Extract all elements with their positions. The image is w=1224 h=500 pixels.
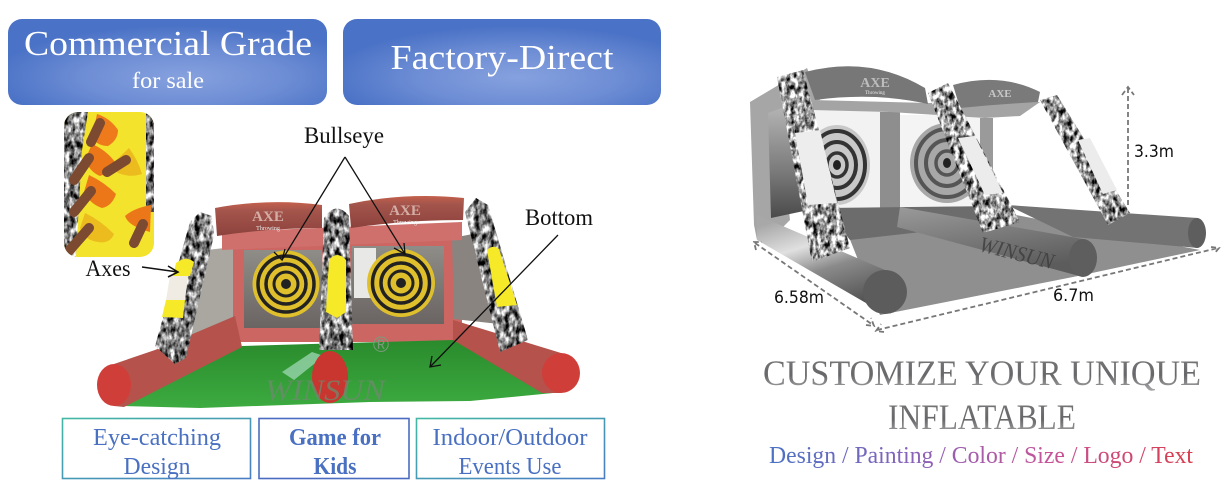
box: Game for Kids: Kids xyxy=(314,454,356,480)
box: Indoor/Outdoor Events Use xyxy=(416,418,604,480)
arrows from Bullseye label xyxy=(274,157,405,260)
box: Game for Kids: Game for xyxy=(289,425,381,451)
button: Commercial Grade for sale xyxy=(8,19,327,105)
back wall frame xyxy=(222,232,462,342)
label: Axes: Axes xyxy=(86,256,131,281)
dimension label: 3.3m: 3.3m xyxy=(1134,142,1174,162)
dimension arrow: 3.3m height xyxy=(1122,87,1134,205)
box: Game for Kids xyxy=(259,418,409,480)
tube rear xyxy=(1007,205,1206,248)
button: Commercial Grade for sale: Commercial Grade xyxy=(24,24,312,63)
banner front xyxy=(805,66,928,104)
right log xyxy=(465,198,528,352)
banner rear: AXE xyxy=(988,88,1012,100)
banner right: AXE xyxy=(389,203,421,219)
right tube xyxy=(453,320,580,393)
arrow from Axes label xyxy=(142,266,178,277)
box: Eye-catching Design: Design xyxy=(124,454,190,480)
heading: Customize your unique inflatable: CUSTOMIZE YOUR UNIQUE xyxy=(763,353,1201,393)
box: Indoor/Outdoor Events Use: Indoor/Outdoor xyxy=(432,425,588,451)
floor xyxy=(847,212,1200,315)
heading: Customize your unique inflatable: INFLATABLE xyxy=(888,397,1076,437)
banner right: Throwing xyxy=(393,220,417,226)
button: Factory-Direct xyxy=(343,19,661,105)
left log xyxy=(155,212,214,364)
tube middle xyxy=(897,207,1097,277)
banner rear xyxy=(953,80,1040,108)
dimension label: 6.58m: 6.58m xyxy=(774,288,824,308)
banner front: AXE xyxy=(860,76,890,91)
green floor xyxy=(124,340,553,408)
banner right xyxy=(349,196,464,228)
log middle xyxy=(928,83,1020,233)
box: Eye-catching Design: Eye-catching xyxy=(93,425,221,451)
middle tube end xyxy=(312,351,348,403)
inset photo: axes on yellow panel xyxy=(64,112,154,257)
dimension arrow: 6.58m depth xyxy=(754,242,874,326)
bullseye left xyxy=(252,250,320,318)
banner front: Throwing xyxy=(865,91,885,96)
options line: Design / Painting / Color / Size / Logo / Text xyxy=(769,443,1193,469)
arrow from Bottom label xyxy=(430,235,558,367)
banner left xyxy=(215,202,322,236)
bullseye right xyxy=(367,249,435,317)
heading: Customize your unique inflatable xyxy=(763,353,1201,437)
label: Bottom: Bottom xyxy=(525,205,593,230)
watermark: WINSUN xyxy=(265,374,387,407)
box: Eye-catching Design xyxy=(62,418,250,480)
log rear xyxy=(1040,95,1130,225)
roof beam xyxy=(222,222,462,250)
back wall xyxy=(812,100,1040,240)
left tube xyxy=(97,316,242,407)
banner left: Throwing xyxy=(256,226,280,232)
floor shine xyxy=(282,352,324,380)
tube front xyxy=(757,215,907,314)
target left xyxy=(804,125,870,205)
target right xyxy=(910,123,984,203)
box: Indoor/Outdoor Events Use: Events Use xyxy=(458,454,562,480)
inflatable axe throwing game, colour photo xyxy=(97,196,580,408)
side frame xyxy=(750,68,832,240)
dimension label: 6.7m: 6.7m xyxy=(1053,286,1094,306)
button: Factory-Direct: Factory-Direct xyxy=(390,38,614,77)
watermark: WINSUN xyxy=(977,231,1058,274)
banner left: AXE xyxy=(252,209,284,225)
registered mark: ® xyxy=(373,332,389,357)
middle log xyxy=(319,208,353,350)
dimension arrow: 6.7m width xyxy=(876,247,1219,332)
inflatable in greyscale with dimensions xyxy=(750,66,1206,315)
button: Commercial Grade for sale: for sale xyxy=(132,68,204,93)
windows xyxy=(188,233,508,347)
label: Bullseye: Bullseye xyxy=(304,123,384,148)
log front xyxy=(777,70,850,262)
